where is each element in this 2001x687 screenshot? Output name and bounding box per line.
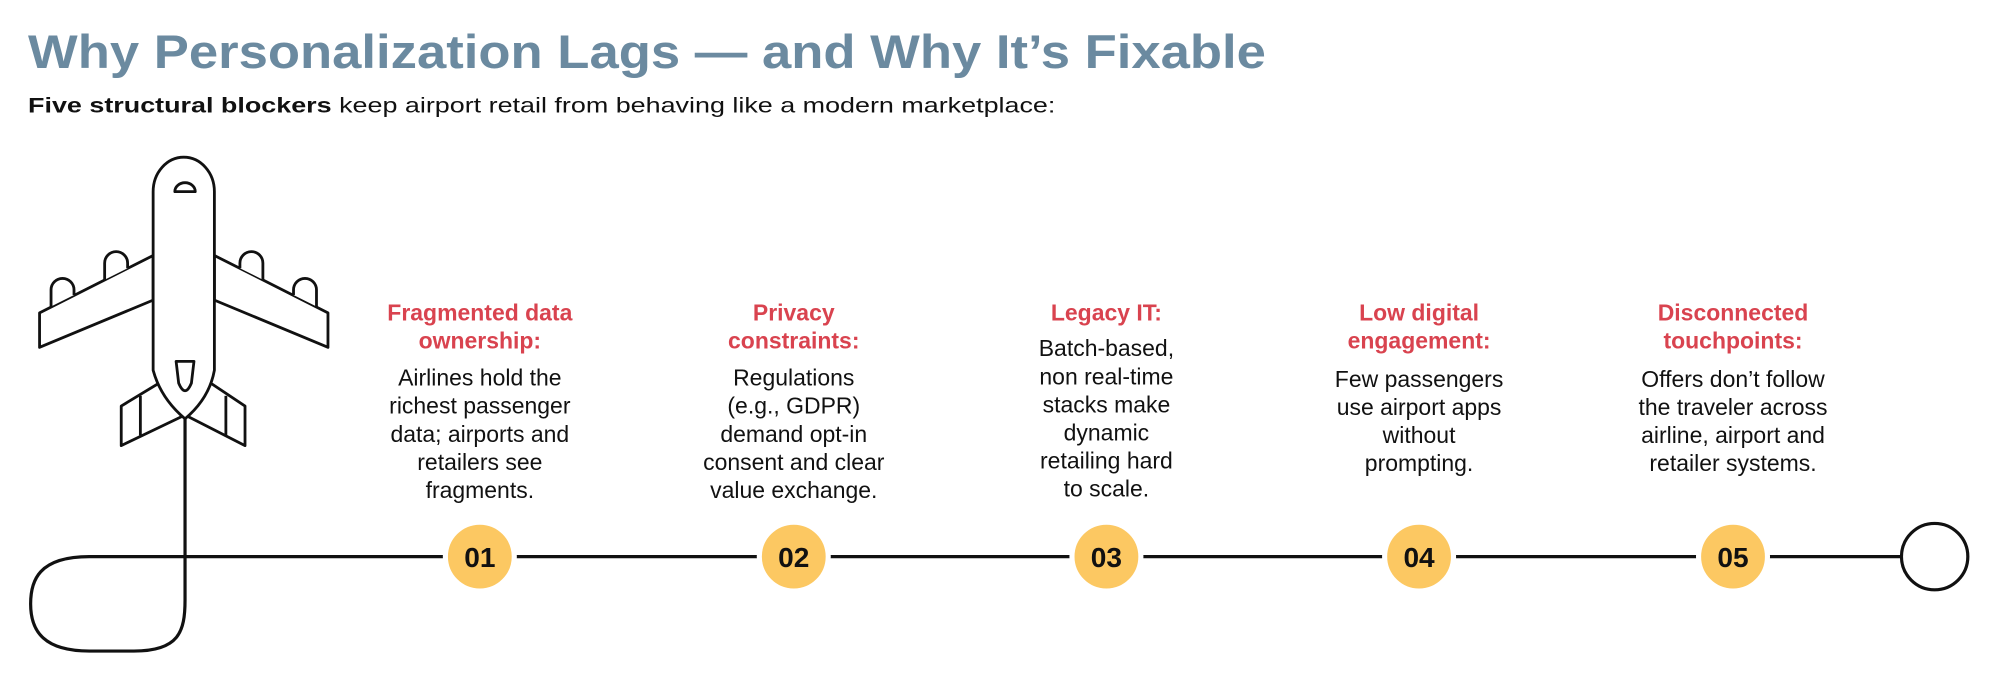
end circle (1901, 523, 1968, 590)
step markers: 02 (778, 542, 809, 573)
blocker 3 text: retailing hard (1040, 448, 1173, 474)
blocker 4 text: use airport apps (1337, 394, 1501, 420)
blocker 5 text: airline, airport and (1641, 422, 1825, 448)
blocker 5 text: touchpoints: (1663, 328, 1803, 354)
blocker 1 text: ownership: (419, 328, 541, 354)
blocker 3 text: to scale. (1064, 476, 1149, 502)
blocker 1 text: fragments. (426, 477, 534, 503)
blocker 3 text: Legacy IT: (1051, 300, 1162, 326)
icon: airplane (40, 157, 328, 446)
title: Why Personalization Lags — and Why It’s Fixable (28, 26, 1266, 79)
blocker 2 text: Regulations (733, 365, 854, 391)
blocker 2 text (703, 300, 885, 503)
blocker 4 text: without (1382, 422, 1456, 448)
subtitle: Five structural blockers keep airport retail from behaving like a modern marketplace: (28, 93, 1055, 118)
blocker 1 text: Airlines hold the (398, 365, 562, 391)
step markers (445, 522, 1767, 591)
blocker 1 text: retailers see (417, 449, 542, 475)
blocker 2 text: demand opt-in (720, 421, 867, 447)
step markers: 01 (464, 542, 495, 573)
blocker 5 text: the traveler across (1639, 394, 1827, 420)
blocker 3 text (1039, 300, 1174, 502)
blocker 1 text (387, 300, 573, 503)
blocker 2 text: consent and clear (703, 449, 885, 475)
blocker 2 text: Privacy (753, 300, 835, 326)
blocker 5 text: Offers don’t follow (1641, 366, 1825, 392)
blocker 5 text: retailer systems. (1649, 450, 1817, 476)
blocker 4 text: engagement: (1348, 328, 1491, 354)
blocker 4 text (1335, 300, 1503, 476)
blocker 3 text: dynamic (1064, 419, 1149, 445)
blocker 5 text (1639, 300, 1827, 476)
blocker 4 text: Low digital (1359, 300, 1479, 326)
blocker 2 text: constraints: (728, 328, 859, 354)
blocker 2 text: (e.g., GDPR) (727, 393, 860, 419)
step markers: 05 (1717, 542, 1749, 573)
blocker 4 text: Few passengers (1335, 366, 1503, 392)
step markers: 03 (1091, 542, 1122, 573)
blocker 1 text: richest passenger (389, 393, 571, 419)
timeline path (31, 414, 1901, 651)
blocker 4 text: prompting. (1365, 450, 1473, 476)
blocker 3 text: stacks make (1043, 391, 1170, 417)
blocker 1 text: data; airports and (390, 421, 569, 447)
step markers: 04 (1403, 542, 1435, 573)
blocker 2 text: value exchange. (710, 477, 877, 503)
blocker 1 text: Fragmented data (387, 300, 573, 326)
blocker 3 text: Batch-based, (1039, 335, 1174, 361)
blocker 3 text: non real-time (1039, 363, 1173, 389)
blocker 5 text: Disconnected (1658, 300, 1808, 326)
